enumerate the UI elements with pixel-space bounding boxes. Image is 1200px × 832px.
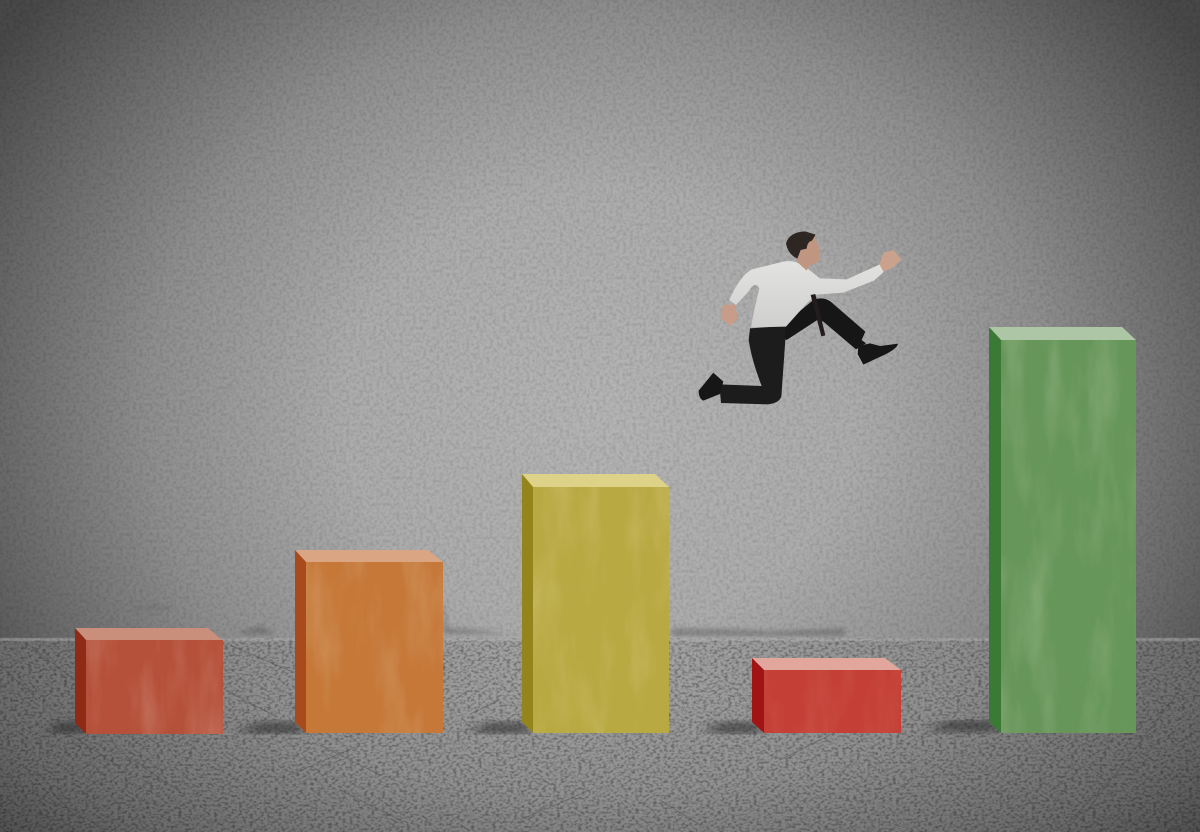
face bbox=[797, 237, 820, 271]
front shoe bbox=[858, 343, 898, 365]
near leg and trousers bbox=[719, 326, 785, 404]
front hand bbox=[879, 250, 901, 272]
hair bbox=[786, 231, 816, 259]
bar 2: orange block bbox=[295, 550, 443, 733]
bar 1: terracotta red block bbox=[75, 628, 223, 734]
back shoe bbox=[699, 373, 723, 401]
white shirt bbox=[729, 261, 884, 327]
far leg and trousers bbox=[780, 298, 866, 349]
bar 4: short red block bbox=[752, 658, 901, 733]
background wall bbox=[0, 0, 1200, 640]
back hand bbox=[721, 304, 738, 326]
bar 5: tall green block bbox=[989, 327, 1136, 733]
bar 3: yellow block bbox=[522, 474, 669, 733]
tie bbox=[811, 294, 825, 336]
floor bbox=[0, 638, 1200, 832]
jumping businessman bbox=[699, 231, 901, 404]
block shadows on the floor bbox=[46, 721, 998, 733]
